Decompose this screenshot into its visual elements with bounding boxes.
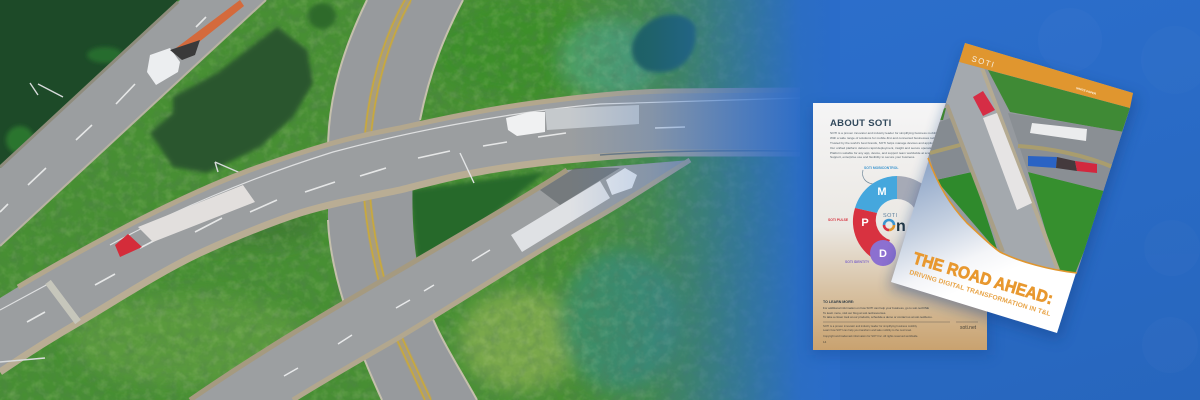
cover title: THE ROAD AHEAD: xyxy=(911,249,1055,308)
heading: ABOUT SOTI xyxy=(830,118,892,129)
grass base xyxy=(0,0,830,400)
lower left grass xyxy=(936,172,998,252)
truck: white trailer on lower bridge xyxy=(511,168,637,252)
body copy xyxy=(830,131,941,159)
grass texture xyxy=(0,0,830,400)
white truck xyxy=(1030,123,1087,141)
grass highlights xyxy=(0,0,830,400)
main bridge xyxy=(0,90,800,372)
top grass xyxy=(988,70,1130,132)
blue truck trailer xyxy=(1028,156,1057,168)
divider xyxy=(823,322,978,323)
body copy: Our unified platform delivers rapid deployment, insight and secure operations xyxy=(830,146,936,150)
label: MobiControl: SOTI MOBICONTROL xyxy=(864,166,898,170)
connector xyxy=(863,170,873,184)
dark truck frame xyxy=(1056,157,1077,171)
page number: 14 xyxy=(823,340,827,344)
lamp post xyxy=(30,83,63,97)
segment: M blue xyxy=(855,176,897,213)
front page: brochure cover xyxy=(889,43,1140,340)
label: Identity: SOTI IDENTITY xyxy=(845,260,870,264)
horizontal road xyxy=(1008,113,1125,192)
learn more copy: To learn more, visit our blog at soti.net/resources. xyxy=(823,311,886,315)
blue fade overlay xyxy=(570,0,840,400)
segment: D purple xyxy=(870,240,896,266)
aerial highway photo xyxy=(0,0,840,400)
truck: white tanker xyxy=(506,105,639,136)
orange curve xyxy=(928,158,1077,273)
body copy: SOTI is a proven innovator and industry leader for simplifying business mobility xyxy=(830,131,939,135)
red truck cab xyxy=(1075,161,1097,173)
soti.net: soti.net xyxy=(960,325,977,331)
grass patches xyxy=(70,0,680,390)
horizontal median xyxy=(930,145,1115,168)
flatbed truck xyxy=(147,0,244,85)
letter P: P xyxy=(861,217,869,229)
red cab xyxy=(973,91,995,116)
decorative background blobs xyxy=(1038,8,1200,373)
learn more copy xyxy=(823,307,932,318)
label: Pulse: SOTI PULSE xyxy=(828,218,849,222)
small grass patch xyxy=(940,108,946,120)
cover photo xyxy=(928,62,1130,273)
cover sheet xyxy=(891,43,1133,333)
centre logo ring xyxy=(884,220,894,230)
lamp post xyxy=(460,153,474,183)
centre logo text: SOTI xyxy=(883,213,898,219)
donut chart xyxy=(852,176,922,266)
letter M: M xyxy=(877,186,887,198)
footer copy: SOTI is a proven innovator and industry leader for simplifying business mobility xyxy=(823,324,918,328)
dark forest xyxy=(0,0,178,165)
footer copy: Copyright and trademark information for SOTI Inc. All rights reserved worldwide. xyxy=(823,334,918,338)
diagonal road xyxy=(946,62,1055,268)
lamp post xyxy=(0,358,45,362)
right rail xyxy=(982,68,1058,270)
body copy: Platform suitable for any app, device, and support team worldwide at scale xyxy=(830,151,932,155)
body copy: With a wide range of solutions for mobile-first and connected businesses today xyxy=(830,136,938,140)
learn more copy: To take a closer look at our products, schedule a demo or contact us at soti.net/demo. xyxy=(823,315,933,319)
header small text: WHITE PAPER xyxy=(1076,86,1097,96)
back page: About SOTI xyxy=(811,103,991,355)
orange header band xyxy=(959,43,1133,109)
page sheet xyxy=(813,103,987,350)
cover subtitle: DRIVING DIGITAL TRANSFORMATION IN T&L xyxy=(908,269,1051,318)
body copy: Trusted by the world's best brands, SOTI helps manage devices and applications xyxy=(830,141,941,145)
bushes xyxy=(150,3,696,260)
to learn more: TO LEARN MORE: xyxy=(823,300,854,304)
centre logo letter: n xyxy=(896,218,906,235)
learn more copy: For additional information on how SOTI can help your business, go to soti.net/ONE xyxy=(823,306,929,310)
SOTI logo: SOTI xyxy=(970,54,996,70)
lower right grass xyxy=(1028,172,1108,276)
footer copy xyxy=(823,325,918,338)
page contents xyxy=(823,118,978,344)
road base xyxy=(928,62,1130,273)
footer copy: Learn how SOTI can help you transform and take mobility to the next level. xyxy=(823,328,912,332)
letter D: D xyxy=(879,248,887,260)
truck: red cab with white trailer xyxy=(115,185,255,257)
loop road xyxy=(328,0,477,400)
body copy: Support, enterprise use and flexibility to secure your business. xyxy=(830,155,915,159)
left rail xyxy=(947,105,1003,252)
segment: P red xyxy=(853,208,890,262)
lamp post xyxy=(215,162,245,175)
cover shadow xyxy=(889,49,1138,340)
segment: gray xyxy=(897,176,922,208)
long white truck trailer xyxy=(983,113,1032,210)
top-left road xyxy=(0,0,266,246)
lower bridge xyxy=(190,160,690,400)
page shadow xyxy=(811,107,991,355)
